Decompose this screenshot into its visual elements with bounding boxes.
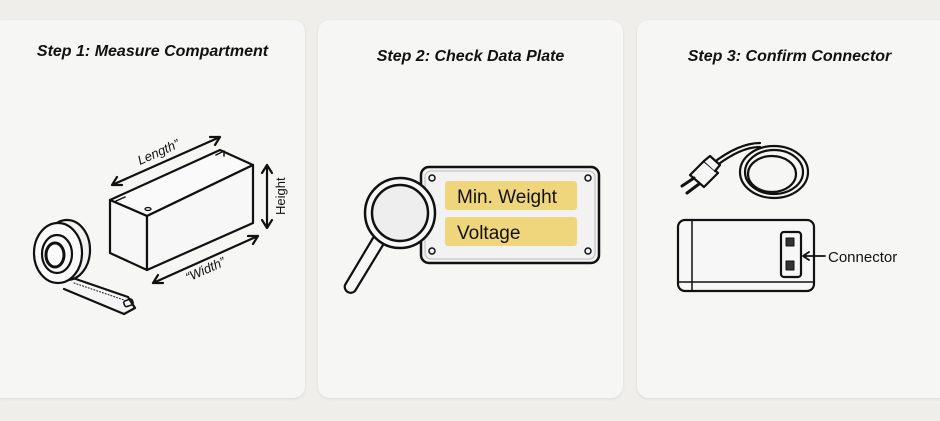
panel: step 3 — [637, 20, 940, 398]
panel: step 1 — [0, 20, 305, 398]
icon: box — [110, 150, 253, 270]
icon: tape measure — [34, 220, 135, 314]
arrow: height — [262, 165, 288, 228]
label: min weight — [445, 181, 577, 210]
icon: adapter — [678, 220, 814, 291]
arrow: height: Height — [273, 177, 288, 215]
heading: step 1: Step 1: Measure Compartment — [37, 43, 268, 60]
label: voltage — [445, 217, 577, 246]
heading: step 3: Step 3: Confirm Connector — [688, 48, 891, 65]
label: voltage: Voltage — [457, 223, 520, 244]
arrow: length: Length” — [135, 136, 182, 168]
label: min weight: Min. Weight — [457, 187, 558, 208]
callout: connector: Connector — [828, 249, 897, 266]
data plate — [421, 167, 599, 263]
heading: step 2: Step 2: Check Data Plate — [377, 48, 564, 65]
arrow: length — [112, 136, 220, 185]
icon: magnifying glass — [345, 178, 435, 293]
panel: step 2 — [318, 20, 623, 398]
icon: power cord — [682, 143, 808, 198]
arrow: width: “Width” — [183, 254, 228, 285]
arrow: width — [153, 236, 258, 285]
